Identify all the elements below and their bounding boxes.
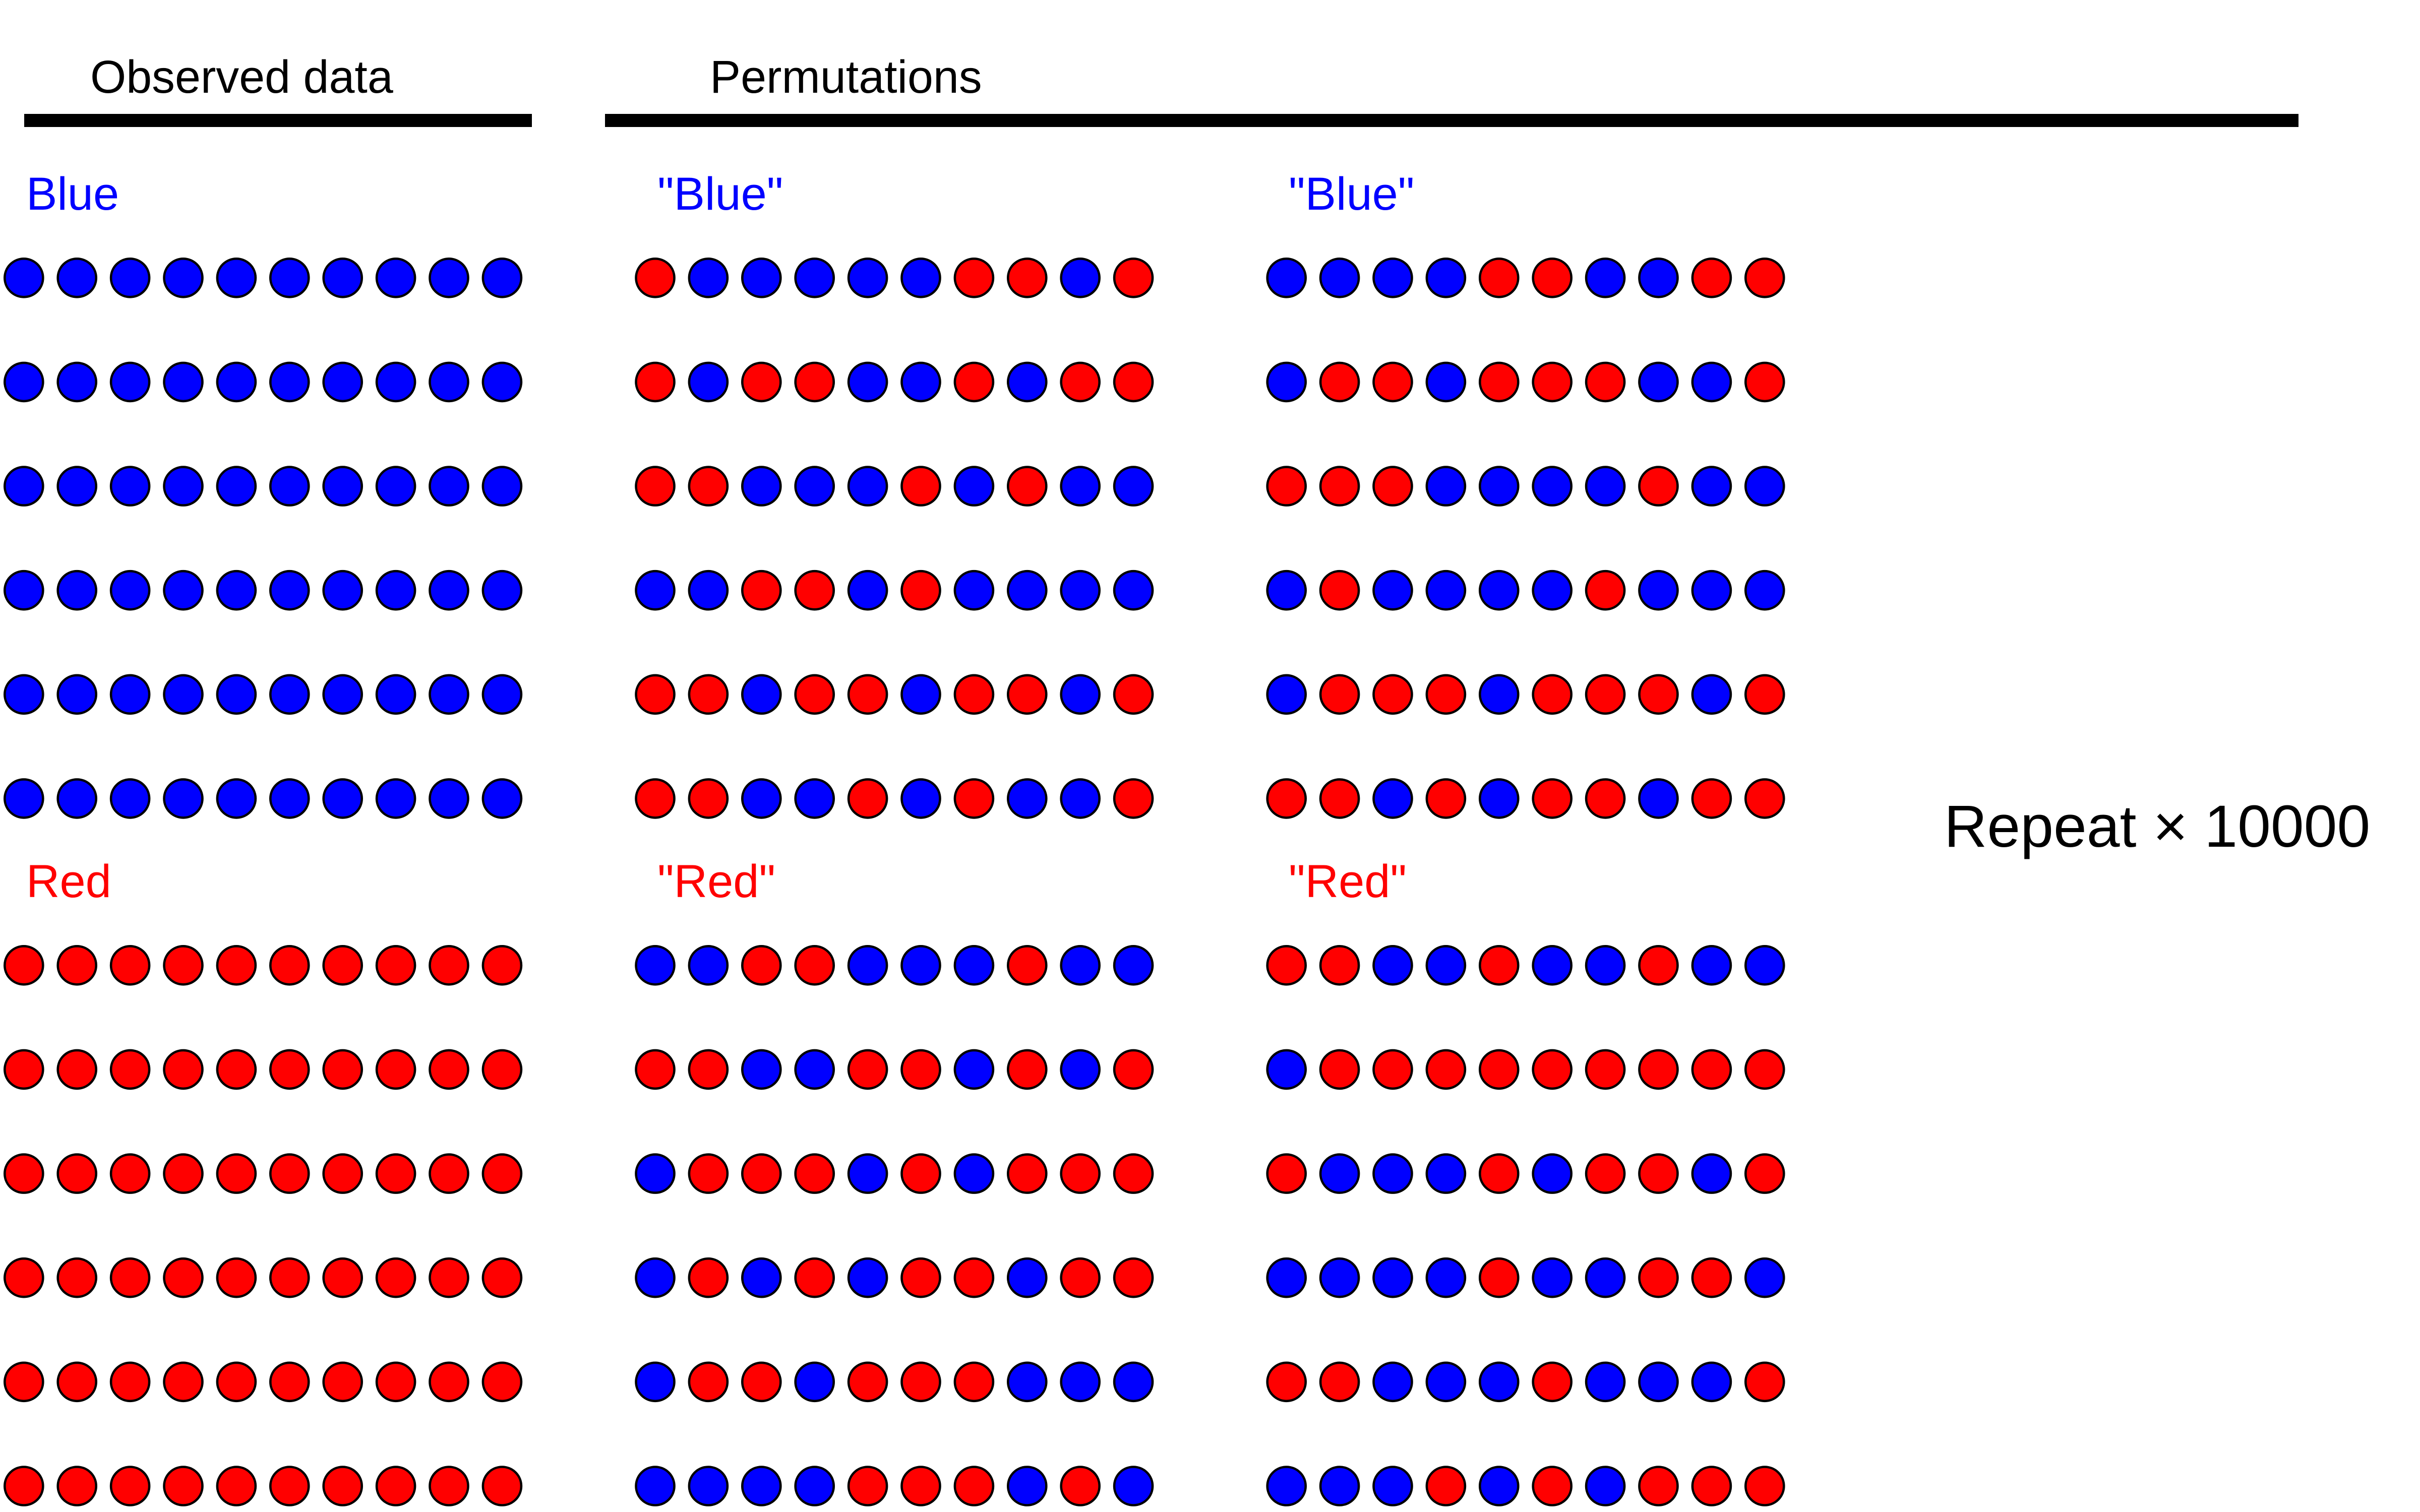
row 5 bbox=[5, 675, 521, 714]
label: Red: Red bbox=[26, 856, 111, 907]
row 1 bbox=[5, 259, 521, 297]
row 1 bbox=[636, 946, 1153, 984]
row 6 bbox=[636, 779, 1153, 817]
row 3 bbox=[5, 1155, 521, 1193]
row 6 bbox=[5, 779, 521, 817]
label: permutation 1 Blue: "Blue" bbox=[657, 168, 783, 220]
row 1 bbox=[5, 946, 521, 984]
row 6 bbox=[1267, 1467, 1784, 1505]
row 6 bbox=[1267, 779, 1784, 817]
dot grid: permutation 2 "Red" group bbox=[1267, 946, 1784, 1505]
label: Blue: Blue bbox=[26, 168, 119, 220]
row 5 bbox=[5, 1363, 521, 1401]
row 4 bbox=[1267, 571, 1784, 609]
row 3 bbox=[636, 467, 1153, 506]
row 4 bbox=[1267, 1258, 1784, 1297]
label: permutation 2 Blue: "Blue" bbox=[1289, 168, 1414, 220]
label: permutation 1 Red: "Red" bbox=[657, 856, 775, 907]
row 2 bbox=[636, 363, 1153, 401]
heading rule: Observed data bbox=[24, 114, 532, 127]
row 2 bbox=[636, 1050, 1153, 1089]
dot grid: observed red group bbox=[5, 946, 521, 1505]
row 4 bbox=[5, 571, 521, 609]
label: permutation 2 Red: "Red" bbox=[1289, 856, 1407, 907]
dot grid: permutation 1 "Blue" group bbox=[636, 259, 1153, 817]
row 2 bbox=[5, 1050, 521, 1089]
row 1 bbox=[1267, 259, 1784, 297]
row 2 bbox=[5, 363, 521, 401]
row 4 bbox=[636, 1258, 1153, 1297]
row 6 bbox=[5, 1467, 521, 1505]
row 2 bbox=[1267, 1050, 1784, 1089]
row 4 bbox=[5, 1258, 521, 1297]
callout: Repeat × 10000: Repeat × 10000 bbox=[1944, 793, 2370, 860]
row 6 bbox=[636, 1467, 1153, 1505]
row 5 bbox=[1267, 675, 1784, 714]
row 5 bbox=[1267, 1363, 1784, 1401]
row 5 bbox=[636, 675, 1153, 714]
row 3 bbox=[5, 467, 521, 506]
row 1 bbox=[1267, 946, 1784, 984]
row 4 bbox=[636, 571, 1153, 609]
dot grid: permutation 1 "Red" group bbox=[636, 946, 1153, 1505]
row 2 bbox=[1267, 363, 1784, 401]
dot grid: permutation 2 "Blue" group bbox=[1267, 259, 1784, 817]
row 3 bbox=[1267, 1155, 1784, 1193]
heading: Permutations: Permutations bbox=[710, 51, 982, 103]
row 1 bbox=[636, 259, 1153, 297]
heading rule: Permutations bbox=[605, 114, 2298, 127]
row 3 bbox=[636, 1155, 1153, 1193]
row 3 bbox=[1267, 467, 1784, 506]
dot grid: observed blue group bbox=[5, 259, 521, 817]
row 5 bbox=[636, 1363, 1153, 1401]
heading: Observed data: Observed data bbox=[90, 51, 393, 103]
